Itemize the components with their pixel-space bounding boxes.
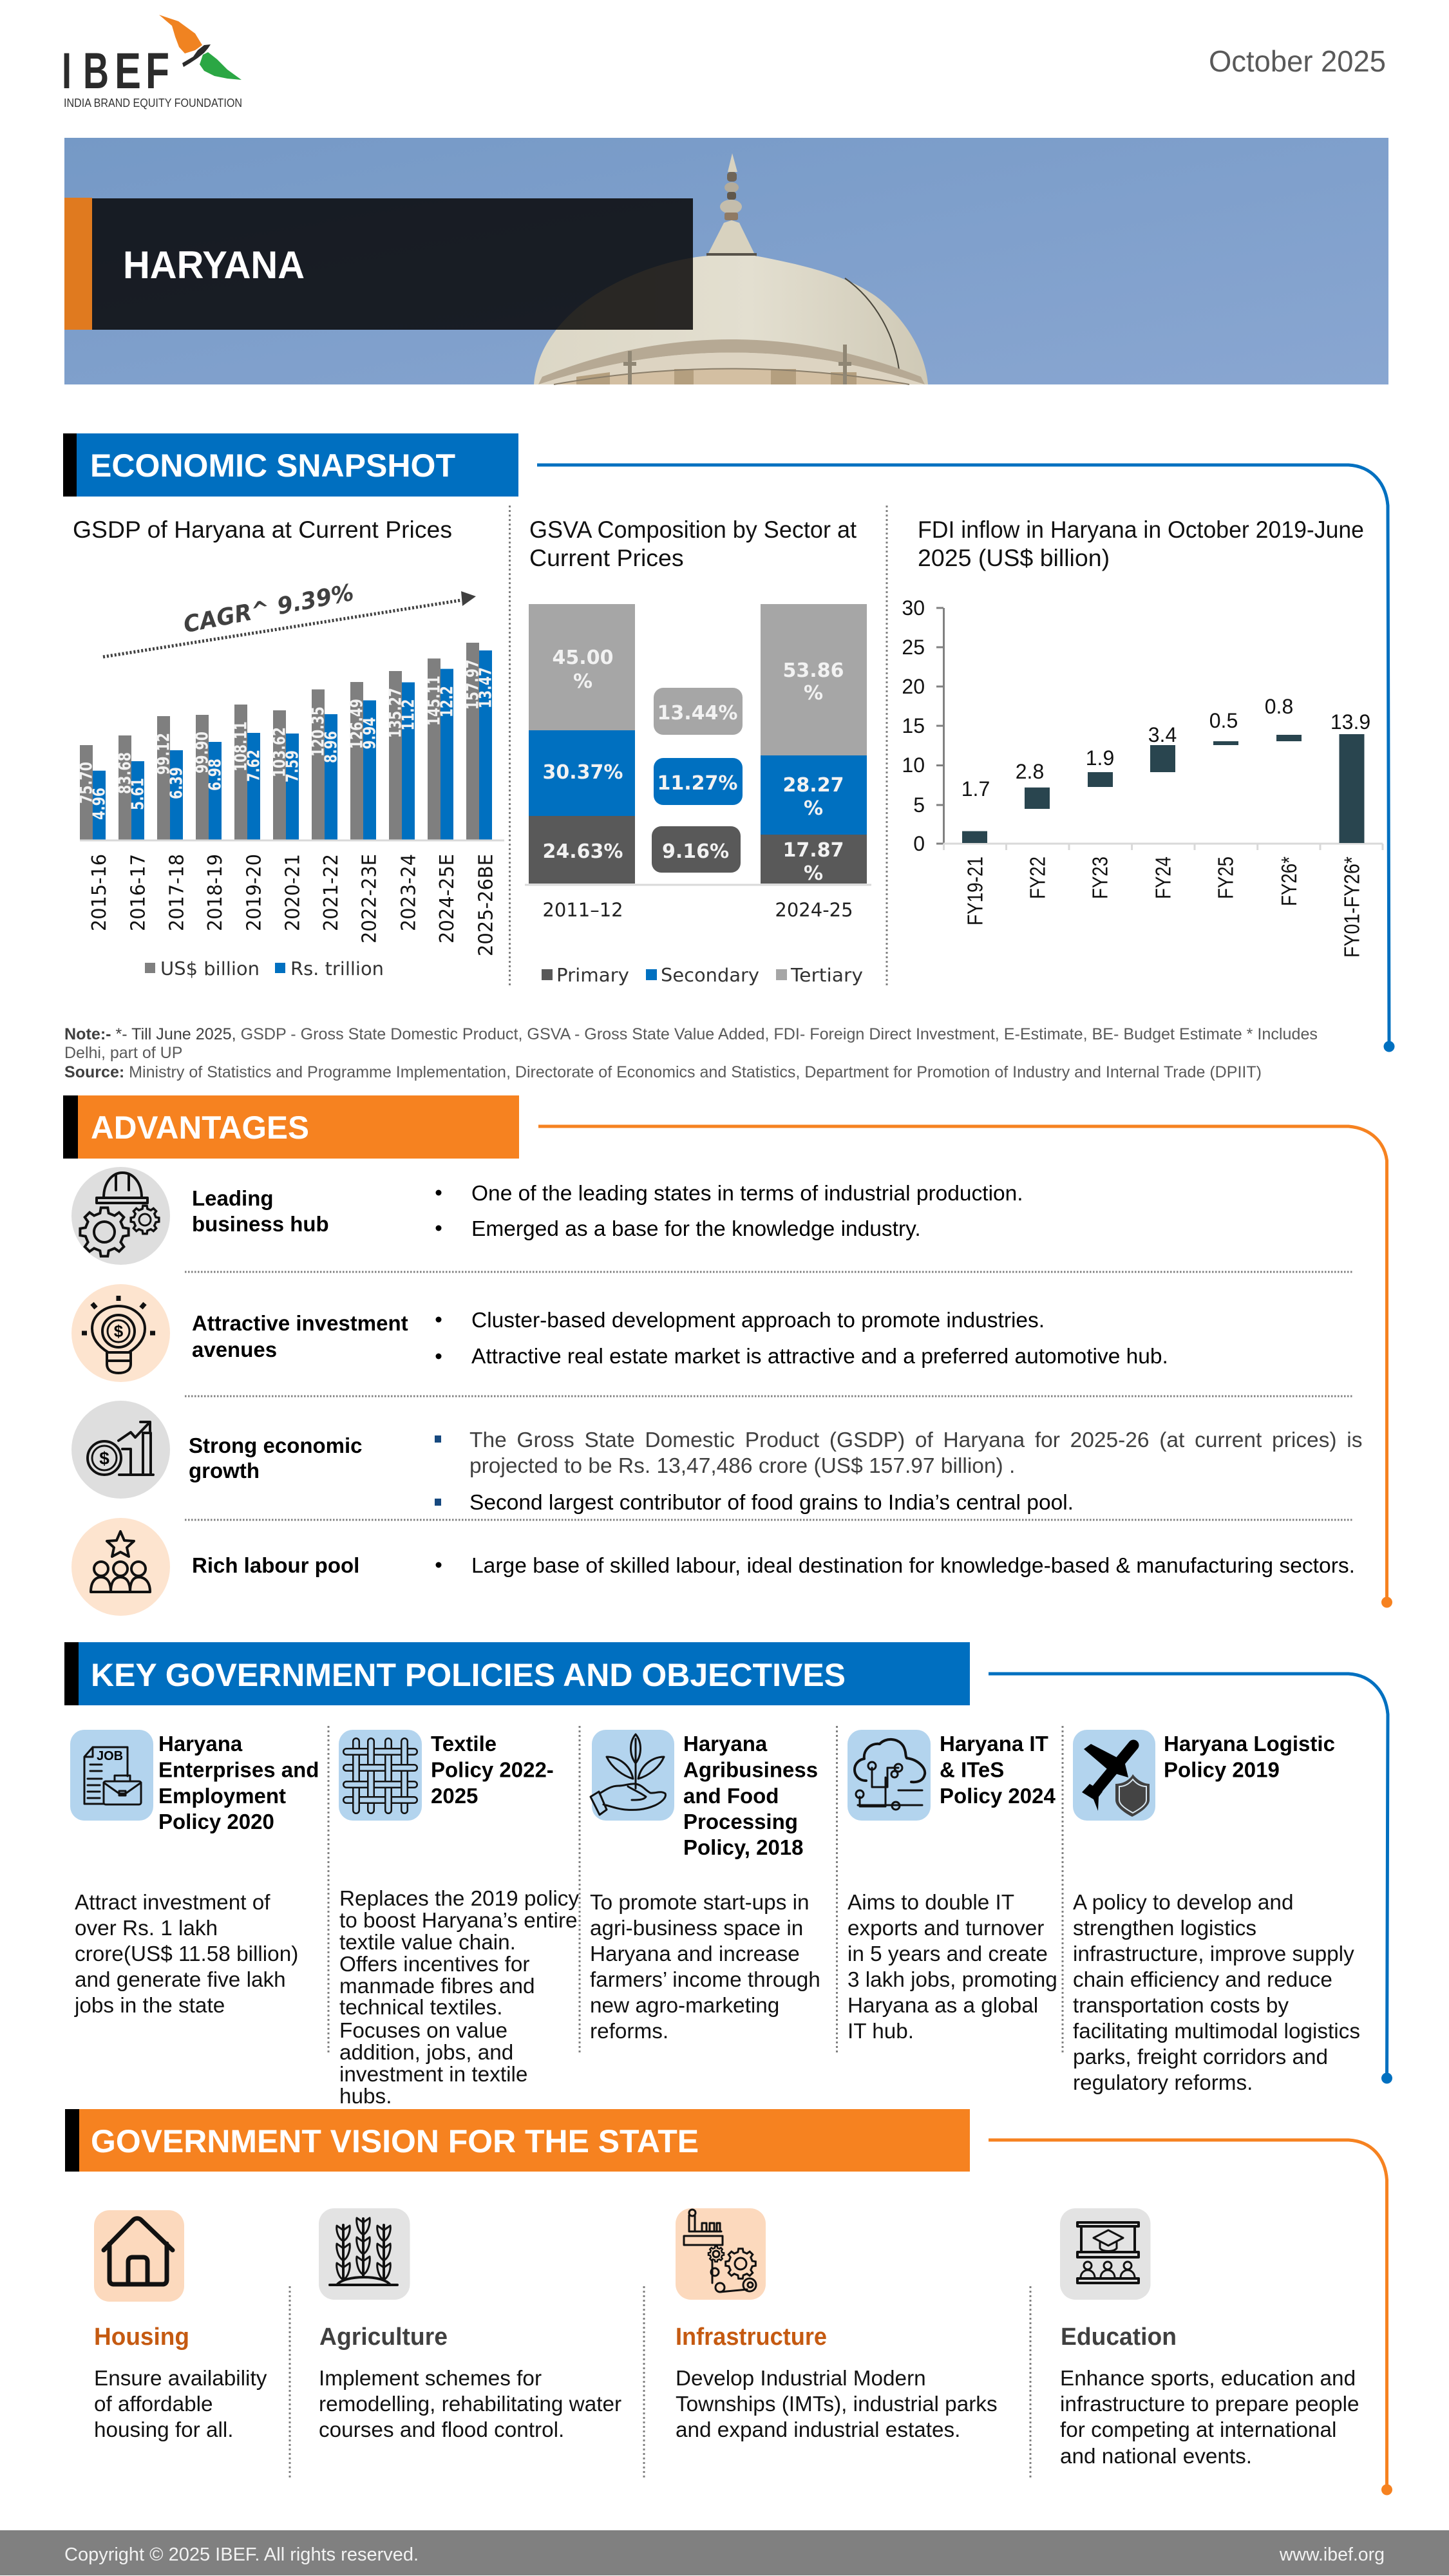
- y axis: [902, 596, 944, 855]
- bar value labels: [77, 659, 496, 820]
- x axis years: 2018-19: [204, 854, 227, 931]
- section heading: advantages: [63, 1095, 519, 1159]
- bullets: Second largest contributor of food grains to India’s central pool.: [469, 1491, 1074, 1515]
- year labels: 2011–12: [542, 899, 623, 921]
- bullets: The Gross State Domestic Product (GSDP) of Haryana for 2025-26 (at current prices) is: [469, 1428, 1362, 1452]
- chart title: GSVA Composition by Sector at: [529, 516, 857, 543]
- bar value labels: 135.27: [386, 688, 406, 738]
- value labels: 13.9: [1331, 710, 1370, 734]
- label: growth: [189, 1459, 260, 1482]
- title: Agribusiness: [683, 1758, 818, 1781]
- description: IT hub.: [848, 2020, 914, 2043]
- title: Haryana IT: [940, 1732, 1048, 1756]
- connector: policies: [989, 1674, 1392, 2084]
- policy: textile: [339, 1730, 579, 2108]
- y axis: 5: [913, 793, 925, 817]
- x axis labels: [963, 857, 1364, 958]
- stacked bar 2024-25: 53.86: [783, 659, 844, 682]
- icon: hand and plant: [591, 1730, 674, 1821]
- value labels: [961, 695, 1370, 800]
- description: Haryana as a global: [848, 1994, 1038, 2018]
- title: Textile: [431, 1732, 497, 1756]
- bar value labels: 75.70: [77, 762, 97, 804]
- CAGR arrow: [103, 580, 476, 657]
- heading: Agriculture: [319, 2324, 448, 2351]
- icon: woven textile: [339, 1730, 422, 1821]
- stacked bar 2024-25: %: [804, 797, 823, 820]
- x axis years: 2015-16: [88, 854, 111, 931]
- stacked bar 2024-25: %: [804, 682, 823, 705]
- description: new agro-marketing: [590, 1994, 779, 2018]
- description: Replaces the 2019 policy: [339, 1887, 579, 1911]
- section heading: advantages: ADVANTAGES: [91, 1110, 309, 1146]
- y axis: 30: [902, 596, 925, 620]
- x axis years: 2020-21: [282, 854, 304, 931]
- text: Develop Industrial Modern: [676, 2367, 926, 2391]
- x axis labels: FY19-21: [963, 857, 987, 925]
- vision: infrastructure: [676, 2208, 998, 2442]
- legend: Secondary: [661, 965, 759, 986]
- legend: Rs. trillion: [290, 958, 384, 980]
- bar value labels: 108.11: [232, 721, 251, 772]
- description: and generate five lakh: [75, 1968, 286, 1992]
- value labels: 1.7: [961, 777, 990, 800]
- x axis years: 2016-17: [128, 854, 149, 931]
- icon: job document and briefcase: [70, 1730, 153, 1821]
- legend: [145, 958, 384, 980]
- bar value labels: 99.12: [155, 733, 174, 775]
- logo: IBEF: [62, 15, 242, 109]
- icon: coin and growth chart: $: [99, 1448, 109, 1468]
- bullets: Cluster-based development approach to promote industries.: [471, 1309, 1045, 1332]
- description: addition, jobs, and: [339, 2041, 513, 2065]
- legend: Tertiary: [790, 965, 863, 986]
- bar value labels: 126.49: [348, 699, 367, 749]
- stacked bar 2011-12: 24.63%: [543, 840, 623, 863]
- waterfall bars: [962, 734, 1364, 843]
- section heading: economic snapshot: ECONOMIC SNAPSHOT: [90, 448, 455, 484]
- bar value labels: 145.11: [425, 676, 444, 726]
- x axis labels: FY25: [1213, 857, 1238, 899]
- bars: Rs. trillion: [93, 650, 492, 840]
- footer: [0, 2530, 1449, 2575]
- description: 3 lakh jobs, promoting: [848, 1968, 1057, 1992]
- text: for competing at international: [1060, 2418, 1336, 2442]
- x axis years: 2022-23E: [358, 854, 381, 943]
- CAGR arrow: CAGR^ 9.39%: [182, 580, 356, 638]
- title: Enterprises and: [158, 1758, 319, 1781]
- heading: Housing: [94, 2324, 189, 2351]
- icon: people and star: [71, 1518, 170, 1616]
- change pills: 9.16%: [662, 840, 729, 863]
- description: Focuses on value: [339, 2019, 507, 2043]
- title: Policy 2020: [158, 1810, 274, 1833]
- logo: IBEF: B: [83, 42, 109, 99]
- bar value labels: 4.96: [90, 788, 109, 820]
- bullets: Attractive real estate market is attractive and a preferred automotive hub.: [471, 1345, 1168, 1368]
- title panel: HARYANA: [123, 243, 305, 287]
- bullets: projected to be Rs. 13,47,486 crore (US$ 157.97 billion) .: [469, 1454, 1015, 1478]
- title: 2025: [431, 1784, 478, 1808]
- bar value labels: 6.98: [206, 759, 225, 791]
- section heading: government vision: [65, 2109, 970, 2172]
- section heading: government vision: GOVERNMENT VISION FOR THE STATE: [91, 2123, 699, 2159]
- advantage: attractive investment avenues: [71, 1284, 1168, 1382]
- change pills: 13.44%: [658, 702, 737, 724]
- description: reforms.: [590, 2020, 668, 2043]
- date: October 2025: [1209, 44, 1386, 78]
- bullets: [435, 1182, 1023, 1241]
- value labels: 3.4: [1148, 723, 1177, 746]
- vision: agriculture: [319, 2208, 621, 2442]
- advantage: strong economic growth: [71, 1401, 1362, 1515]
- bullets: Emerged as a base for the knowledge industry.: [471, 1217, 921, 1241]
- value labels: 1.9: [1086, 746, 1114, 770]
- y axis: 15: [902, 714, 925, 737]
- legend: US$ billion: [160, 958, 260, 980]
- icon: bulb with dollar: [71, 1284, 170, 1382]
- icon: plane and shield: [1073, 1730, 1155, 1821]
- stacked bar 2024-25: [761, 604, 867, 885]
- description: exports and turnover: [848, 1917, 1044, 1940]
- bar value labels: 6.39: [167, 767, 187, 799]
- description: infrastructure, improve supply: [1073, 1942, 1354, 1966]
- title: Employment: [158, 1784, 286, 1808]
- heading: Education: [1061, 2324, 1177, 2351]
- change pills: 11.27%: [658, 772, 737, 795]
- description: regulatory reforms.: [1073, 2071, 1253, 2095]
- x axis years: 2024-25E: [436, 854, 459, 943]
- stacked bar 2011-12: 45.00: [553, 647, 613, 669]
- description: strengthen logistics: [1073, 1917, 1256, 1940]
- bar value labels: 99.90: [193, 732, 213, 773]
- icon: helmet and gears: [71, 1167, 170, 1265]
- note and source: [64, 1025, 1318, 1081]
- description: in 5 years and create: [848, 1942, 1048, 1966]
- y axis: 25: [902, 636, 925, 659]
- heading: Infrastructure: [676, 2324, 827, 2351]
- title panel: [64, 198, 693, 330]
- description: technical textiles.: [339, 1996, 503, 2020]
- chart: GSVA composition: [525, 516, 871, 986]
- text: and national events.: [1060, 2445, 1252, 2468]
- icon: bulb with dollar: $: [114, 1321, 124, 1341]
- label: Rich labour pool: [192, 1553, 359, 1577]
- connector: government vision: [989, 2140, 1392, 2495]
- year labels: 2024-25: [775, 899, 853, 921]
- bar value labels: 9.94: [361, 717, 380, 750]
- bar value labels: 8.96: [322, 731, 341, 763]
- bar value labels: 157.97: [464, 659, 483, 710]
- advantage: rich labour pool: [71, 1518, 1355, 1616]
- description: To promote start-ups in: [590, 1891, 810, 1915]
- description: facilitating multimodal logistics: [1073, 2020, 1360, 2043]
- note and source: Source: Ministry of Statistics and Programme Implementation, Directorate of Economics and Statistics, Department for Promotion of Industry and Internal Trade (DPIIT): [64, 1063, 1262, 1081]
- description: Aims to double IT: [848, 1891, 1014, 1915]
- section heading: key government policies: KEY GOVERNMENT POLICIES AND OBJECTIVES: [91, 1657, 846, 1693]
- description: hubs.: [339, 2085, 392, 2108]
- note and source: Delhi, part of UP: [64, 1044, 182, 1062]
- value labels: 0.8: [1265, 695, 1293, 718]
- change pills: [652, 688, 743, 873]
- year labels: [542, 899, 853, 921]
- bullets: One of the leading states in terms of industrial production.: [471, 1182, 1023, 1206]
- stacked bar 2011-12: %: [573, 670, 592, 693]
- description: manmade fibres and: [339, 1975, 535, 1998]
- x axis years: [88, 854, 498, 956]
- y axis: 20: [902, 675, 925, 698]
- description: crore(US$ 11.58 billion): [75, 1942, 298, 1966]
- value labels: 2.8: [1016, 760, 1044, 783]
- description: chain efficiency and reduce: [1073, 1968, 1332, 1992]
- x axis years: 2017-18: [166, 854, 188, 931]
- description: A policy to develop and: [1073, 1891, 1293, 1915]
- section heading: key government policies: [64, 1642, 970, 1705]
- text: of affordable: [94, 2392, 213, 2416]
- text: and expand industrial estates.: [676, 2418, 960, 2442]
- title: & ITeS: [940, 1758, 1004, 1781]
- title: Policy 2024: [940, 1784, 1056, 1808]
- label: Attractive investment: [192, 1311, 408, 1335]
- bar value labels: 83.68: [116, 752, 135, 794]
- value labels: 0.5: [1209, 709, 1238, 732]
- advantage: leading business hub: [71, 1167, 1023, 1265]
- description: Haryana and increase: [590, 1942, 800, 1966]
- policy: enterprises and employment: [70, 1730, 319, 2018]
- text: housing for all.: [94, 2418, 234, 2442]
- legend: Primary: [556, 965, 629, 986]
- y axis: 10: [902, 753, 925, 777]
- connector: economic snapshot: [537, 465, 1395, 1052]
- bars: US$ billion: [80, 643, 479, 840]
- stacked bar 2024-25: 28.27: [783, 774, 844, 797]
- title: Haryana: [158, 1732, 243, 1756]
- logo: IBEF: F: [146, 42, 169, 99]
- icon: lecture board and audience: [1060, 2208, 1150, 2300]
- logo: IBEF: INDIA BRAND EQUITY FOUNDATION: [64, 97, 242, 109]
- bar value labels: 120.35: [309, 706, 328, 757]
- logo: IBEF: E: [115, 42, 141, 99]
- footer: Copyright © 2025 IBEF. All rights reserved.: [64, 2544, 419, 2565]
- stacked bar 2024-25: 17.87: [783, 839, 844, 862]
- section heading: economic snapshot: [63, 433, 518, 497]
- bar value labels: 13.47: [477, 667, 496, 708]
- x axis labels: FY23: [1088, 857, 1112, 899]
- text: Enhance sports, education and: [1060, 2367, 1356, 2391]
- bullets: [435, 1309, 1168, 1368]
- vision: education: [1060, 2208, 1359, 2468]
- x axis labels: FY22: [1025, 857, 1050, 899]
- footer: www.ibef.org: [1279, 2544, 1385, 2565]
- title: Processing: [683, 1810, 798, 1833]
- stacked bar 2011-12: [529, 604, 635, 884]
- text: Implement schemes for: [319, 2367, 542, 2391]
- description: over Rs. 1 lakh: [75, 1917, 218, 1940]
- text: Ensure availability: [94, 2367, 267, 2391]
- bar value labels: 11.2: [399, 699, 419, 730]
- chart: FDI inflow waterfall: [902, 516, 1383, 958]
- connector: advantages: [538, 1126, 1392, 1607]
- bar value labels: 7.62: [245, 750, 264, 782]
- policy: agribusiness: [590, 1730, 820, 2043]
- legend: [542, 965, 863, 986]
- description: textile value chain.: [339, 1931, 516, 1955]
- hero banner: dome photo with state title: [64, 138, 1388, 384]
- bar value labels: 12.2: [438, 686, 457, 717]
- text: Townships (IMTs), industrial parks: [676, 2392, 998, 2416]
- chart title: 2025 (US$ billion): [918, 544, 1110, 571]
- bullets: [435, 1428, 1362, 1515]
- title: and Food: [683, 1784, 779, 1808]
- title: Haryana: [683, 1732, 768, 1756]
- description: farmers’ income through: [590, 1968, 820, 1992]
- icon: coin and growth chart: [71, 1401, 170, 1499]
- description: jobs in the state: [74, 1994, 225, 2018]
- title: Policy, 2018: [683, 1835, 804, 1859]
- text: courses and flood control.: [319, 2418, 564, 2442]
- title: Policy 2022-: [431, 1758, 554, 1781]
- bullet: Large base of skilled labour, ideal destination for knowledge-based & manufacturing sectors.: [471, 1554, 1355, 1578]
- description: parks, freight corridors and: [1073, 2045, 1328, 2069]
- description: investment in textile: [339, 2063, 527, 2087]
- icon: cloud circuit: [848, 1730, 931, 1821]
- title: Haryana Logistic: [1164, 1732, 1335, 1756]
- chart title: GSDP of Haryana at Current Prices: [73, 516, 452, 543]
- logo: IBEF: I: [62, 42, 71, 99]
- description: Offers incentives for: [339, 1953, 529, 1976]
- x axis years: 2025-26BE: [475, 854, 497, 956]
- x axis labels: FY24: [1151, 857, 1175, 899]
- description: agri-business space in: [590, 1917, 803, 1940]
- text: infrastructure to prepare people: [1060, 2392, 1359, 2416]
- chart title: Current Prices: [529, 544, 684, 571]
- policy: logistic: [1073, 1730, 1360, 2095]
- description: Attract investment of: [75, 1891, 270, 1915]
- description: to boost Haryana’s entire: [339, 1909, 578, 1933]
- x axis labels: FY26*: [1277, 857, 1301, 906]
- photo: sky and dome: [64, 138, 1388, 384]
- note and source: Note:- *- Till June 2025, GSDP - Gross State Domestic Product, GSVA - Gross State Value Added, FDI- Foreign Direct Investment, E-Estimate, BE- Budget Estimate * Includes: [64, 1025, 1318, 1043]
- bar value labels: 103.62: [270, 727, 290, 777]
- icon: wheat stalks: [319, 2208, 410, 2300]
- chart title: FDI inflow in Haryana in October 2019-June: [918, 516, 1364, 543]
- description: transportation costs by: [1073, 1994, 1289, 2018]
- icon: house: [94, 2210, 184, 2302]
- title: Policy 2019: [1164, 1758, 1280, 1781]
- bar value labels: 7.59: [283, 750, 303, 782]
- bar value labels: 5.61: [129, 778, 148, 810]
- stacked bar 2024-25: %: [804, 862, 823, 885]
- label: business hub: [192, 1212, 329, 1236]
- icon: factory and gears: [676, 2208, 766, 2300]
- x axis years: 2023-24: [398, 854, 420, 931]
- policy: IT and ITeS: [848, 1730, 1057, 2043]
- stacked bar 2011-12: 30.37%: [543, 761, 623, 784]
- chart: GSDP of Haryana: [73, 516, 504, 980]
- x axis labels: FY01-FY26*: [1340, 857, 1364, 958]
- text: remodelling, rehabilitating water: [319, 2392, 621, 2416]
- x axis years: 2021-22: [320, 854, 343, 931]
- vision: housing: [94, 2210, 267, 2442]
- x axis years: 2019-20: [243, 854, 265, 931]
- label: avenues: [192, 1338, 277, 1361]
- label: Leading: [192, 1186, 274, 1210]
- label: Strong economic: [189, 1434, 363, 1457]
- icon: job document and briefcase: JOB: [97, 1749, 123, 1763]
- y axis: 0: [913, 832, 925, 855]
